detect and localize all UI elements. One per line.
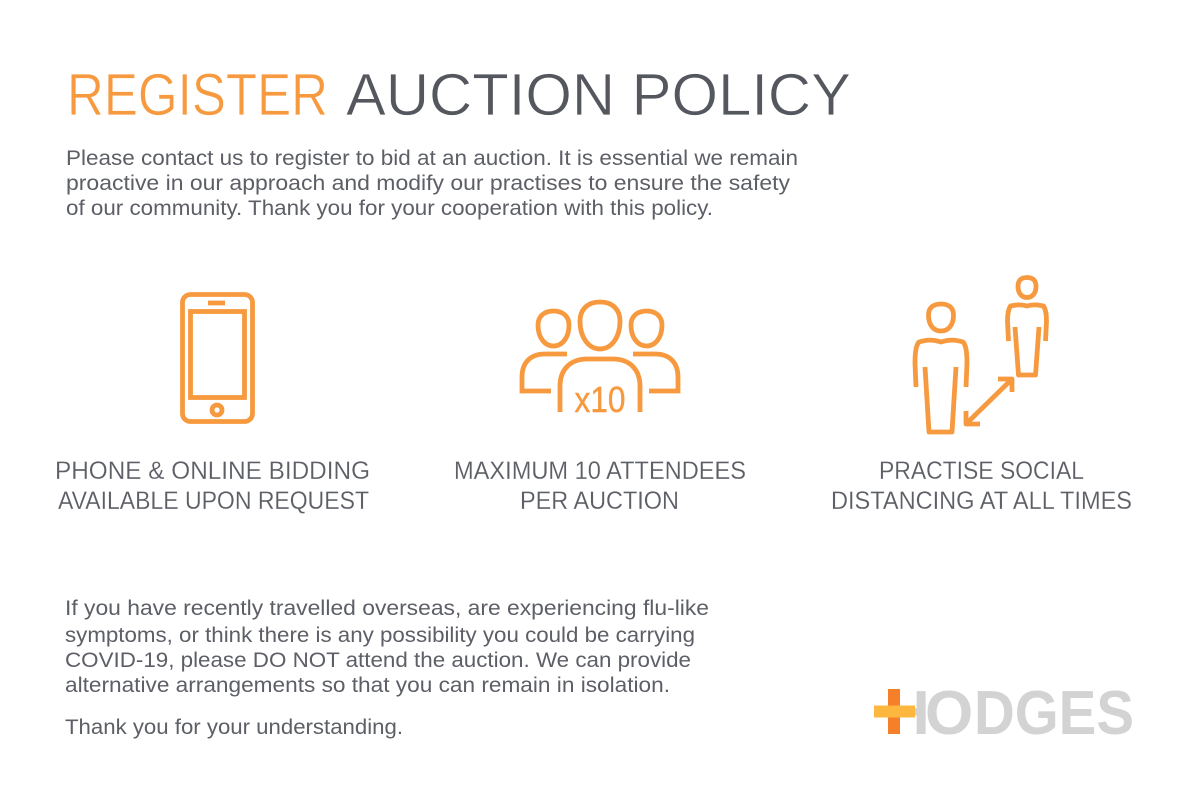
intro paragraph: of our community. Thank you for your cooperation with this policy. xyxy=(66,196,713,220)
title: AUCTION POLICY xyxy=(346,62,851,128)
x10 label: x10 xyxy=(574,379,626,420)
intro paragraph xyxy=(66,146,798,220)
icon: group of ten people xyxy=(522,302,678,420)
icon: smartphone xyxy=(182,294,252,422)
caption: maximum attendees: PER AUCTION xyxy=(520,487,679,515)
caption: social distancing: DISTANCING AT ALL TIMES xyxy=(831,487,1132,515)
logo: Hodges: DGES xyxy=(974,679,1134,748)
title xyxy=(67,62,851,128)
caption: social distancing: PRACTISE SOCIAL xyxy=(879,457,1084,485)
caption: phone and online bidding: AVAILABLE UPON REQUEST xyxy=(58,487,369,515)
health notice paragraph: alternative arrangements so that you can remain in isolation. xyxy=(65,673,670,697)
caption: maximum attendees: MAXIMUM 10 ATTENDEES xyxy=(454,457,746,485)
logo: Hodges xyxy=(874,679,1134,748)
caption: phone and online bidding xyxy=(55,457,370,515)
health notice paragraph xyxy=(65,596,709,697)
logo: Hodges: O xyxy=(925,679,973,748)
intro paragraph: proactive in our approach and modify our practises to ensure the safety xyxy=(66,171,790,195)
caption: maximum attendees xyxy=(454,457,746,515)
health notice paragraph: symptoms, or think there is any possibility you could be carrying xyxy=(65,623,695,647)
caption: social distancing xyxy=(831,457,1132,515)
intro paragraph: Please contact us to register to bid at an auction. It is essential we remain xyxy=(66,146,798,170)
icon: two people social distancing with arrow xyxy=(915,278,1046,432)
title: REGISTER xyxy=(67,62,328,128)
health notice paragraph: If you have recently travelled overseas, are experiencing flu-like xyxy=(65,596,709,620)
thank you note: Thank you for your understanding. xyxy=(65,715,403,739)
health notice paragraph: COVID-19, please DO NOT attend the auction. We can provide xyxy=(65,648,691,672)
caption: phone and online bidding: PHONE & ONLINE BIDDING xyxy=(55,457,370,485)
logo: Hodges: H xyxy=(885,679,930,748)
